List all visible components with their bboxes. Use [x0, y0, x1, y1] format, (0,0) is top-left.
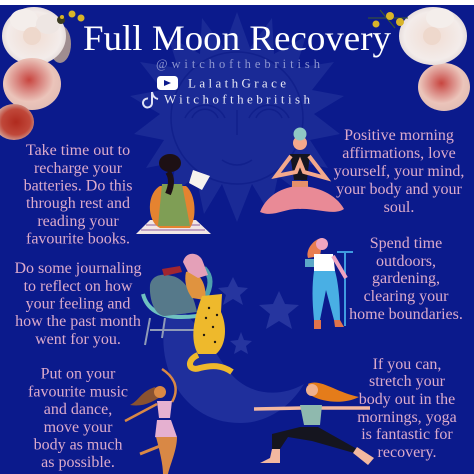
- tiktok line: Witchofthebritish: [164, 92, 310, 106]
- text: outdoors: home boundaries.: [349, 306, 463, 323]
- pink rose: [418, 63, 470, 111]
- text: rest and reading: batteries. Do this: [24, 178, 132, 194]
- text: rest and reading: recharge your: [34, 160, 123, 177]
- text: music and dance: as possible.: [41, 454, 115, 471]
- flowers top left: [0, 7, 71, 140]
- text: rest and reading: favourite books.: [26, 230, 130, 248]
- chair: [143, 268, 210, 345]
- handle: @witchofthebritish: [156, 57, 321, 71]
- yellow sprig left: [57, 10, 84, 24]
- figure: woman yoga pose: [254, 383, 374, 465]
- pink rose: [3, 58, 61, 110]
- legs: [150, 275, 197, 316]
- text: outdoors: Spend time: [370, 235, 442, 252]
- book: [162, 266, 182, 276]
- text: music and dance: body as much: [34, 436, 122, 454]
- text: yoga: If you can,: [373, 356, 441, 373]
- text: yoga: is fantastic for: [361, 426, 453, 443]
- text: music and dance: Put on your: [41, 366, 116, 382]
- figure: woman meditating: [260, 128, 344, 214]
- red rose: [0, 104, 34, 140]
- text: journaling: to reflect on how: [24, 278, 133, 295]
- crescent moon watermark: [163, 300, 304, 423]
- text: yoga: stretch your: [369, 373, 446, 390]
- white rose: [2, 7, 71, 65]
- text: outdoors: gardening,: [372, 270, 440, 287]
- text: music and dance: move your: [44, 419, 113, 436]
- figure: woman dancing: [125, 369, 177, 474]
- text: outdoors: outdoors,: [376, 253, 436, 270]
- text: rest and reading: Take time out to: [26, 142, 130, 159]
- text: affirmations: yourself, your mind,: [334, 163, 464, 180]
- sweater: [185, 271, 205, 300]
- text: affirmations: soul.: [384, 199, 414, 216]
- figure: woman gardening: [305, 238, 353, 329]
- text: music and dance: favourite music: [28, 384, 128, 400]
- figure: woman journaling with leopard: [143, 254, 232, 372]
- text: rest and reading: reading your: [37, 213, 119, 230]
- text: affirmations: your body and your: [336, 181, 463, 198]
- text: yoga: body out in the: [359, 391, 455, 408]
- text: yoga: recovery.: [378, 444, 436, 461]
- icon: tiktok: [143, 92, 158, 107]
- hair: [183, 254, 208, 278]
- text: rest and reading: through rest and: [26, 195, 130, 212]
- figure: woman reading: [136, 154, 211, 234]
- sun watermark: [130, 12, 344, 222]
- icon: youtube: [157, 76, 178, 90]
- text: journaling: your feeling and: [26, 296, 130, 312]
- yellow sprig right: [368, 10, 408, 28]
- book: [189, 170, 210, 190]
- text: yoga: mornings, yoga: [357, 409, 457, 426]
- text: outdoors: clearing your: [364, 288, 449, 305]
- leopard: [190, 294, 232, 372]
- text: music and dance: and dance,: [44, 401, 112, 418]
- white rose: [399, 7, 467, 65]
- text: affirmations: affirmations, love: [342, 145, 456, 162]
- text: journaling: went for you.: [35, 331, 121, 348]
- youtube line: LalathGrace: [188, 76, 286, 90]
- title: Full Moon Recovery: [83, 18, 391, 58]
- text: affirmations: Positive morning: [344, 127, 454, 144]
- flowers top right: [399, 7, 470, 111]
- stars watermark: [218, 277, 299, 354]
- text: journaling: how the past month: [15, 313, 141, 330]
- text: journaling: Do some journaling: [14, 260, 142, 277]
- blanket: [136, 220, 211, 234]
